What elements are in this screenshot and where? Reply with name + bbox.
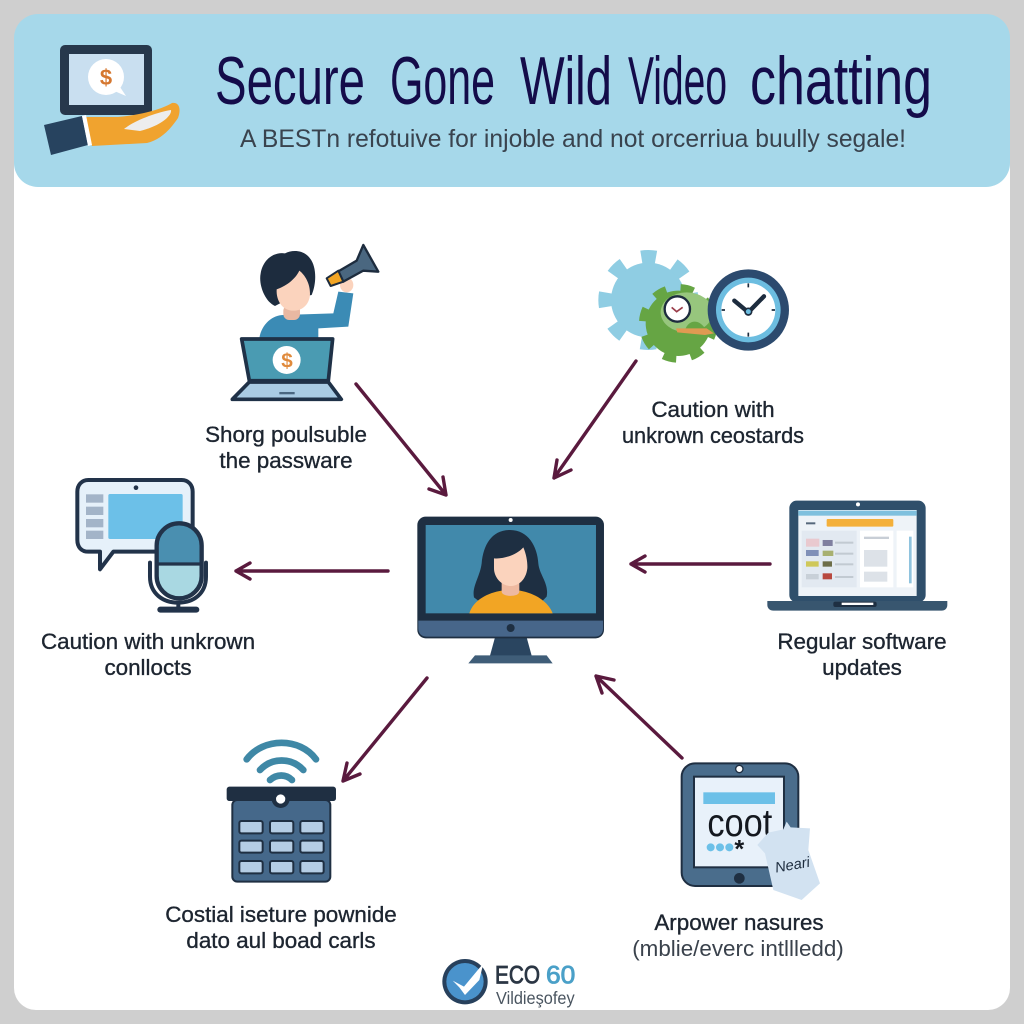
icon: wifi keypad	[227, 743, 336, 882]
icon: chat bubble and microphone	[77, 480, 206, 613]
label: middle right: Regular software	[777, 629, 947, 654]
label: bottom right	[632, 910, 844, 961]
label: middle left: Caution with unkrown	[41, 629, 255, 654]
icon: tablet with login card: Neari	[774, 855, 812, 877]
label: middle left: conllocts	[104, 655, 192, 680]
label: top right: Caution with	[651, 397, 775, 422]
logo: 60	[546, 962, 575, 990]
logo: ECO	[495, 962, 540, 990]
label: top right	[622, 397, 804, 448]
icon: hand holding tablet	[44, 45, 180, 155]
panel: header banner	[14, 14, 1010, 187]
icon: tablet with login card: coot	[707, 801, 772, 845]
label: top left: the passware	[219, 448, 353, 473]
icon: tablet with login card: *	[734, 835, 744, 863]
title: chatting	[750, 43, 932, 119]
label: top left: Shorg poulsuble	[205, 422, 367, 447]
title: Wild	[520, 43, 612, 119]
title: Video	[628, 43, 727, 119]
label: bottom left	[165, 902, 397, 953]
icon: tablet with login card	[682, 763, 820, 900]
label: middle right: updates	[822, 655, 902, 680]
label: top right: unkrown ceostards	[622, 423, 804, 448]
icon: person with megaphone and laptop	[232, 245, 378, 399]
title	[215, 43, 932, 119]
label: bottom right: Arpower nasures	[654, 910, 824, 935]
logo	[442, 959, 575, 1008]
title: Secure	[215, 43, 365, 119]
subtitle: A BESTn refotuive for injoble and not orcerriua buully segale!	[240, 125, 906, 153]
icon: central monitor with video call	[417, 517, 604, 663]
arrows	[236, 361, 770, 781]
title: Gone	[390, 43, 495, 119]
icon: gears and clock	[605, 257, 789, 367]
label: bottom left: Costial iseture pownide	[165, 902, 397, 927]
logo: Vildieşofey	[496, 988, 575, 1008]
icon: hand holding tablet: $	[100, 65, 112, 90]
label: middle left	[41, 629, 255, 680]
icon: laptop with software window	[767, 501, 947, 611]
label: bottom right: (mblie/everc intllledd)	[632, 936, 844, 961]
label: top left	[205, 422, 367, 473]
icon: person with megaphone and laptop: $	[281, 350, 293, 373]
label: middle right	[777, 629, 947, 680]
label: bottom left: dato aul boad carls	[186, 928, 376, 953]
